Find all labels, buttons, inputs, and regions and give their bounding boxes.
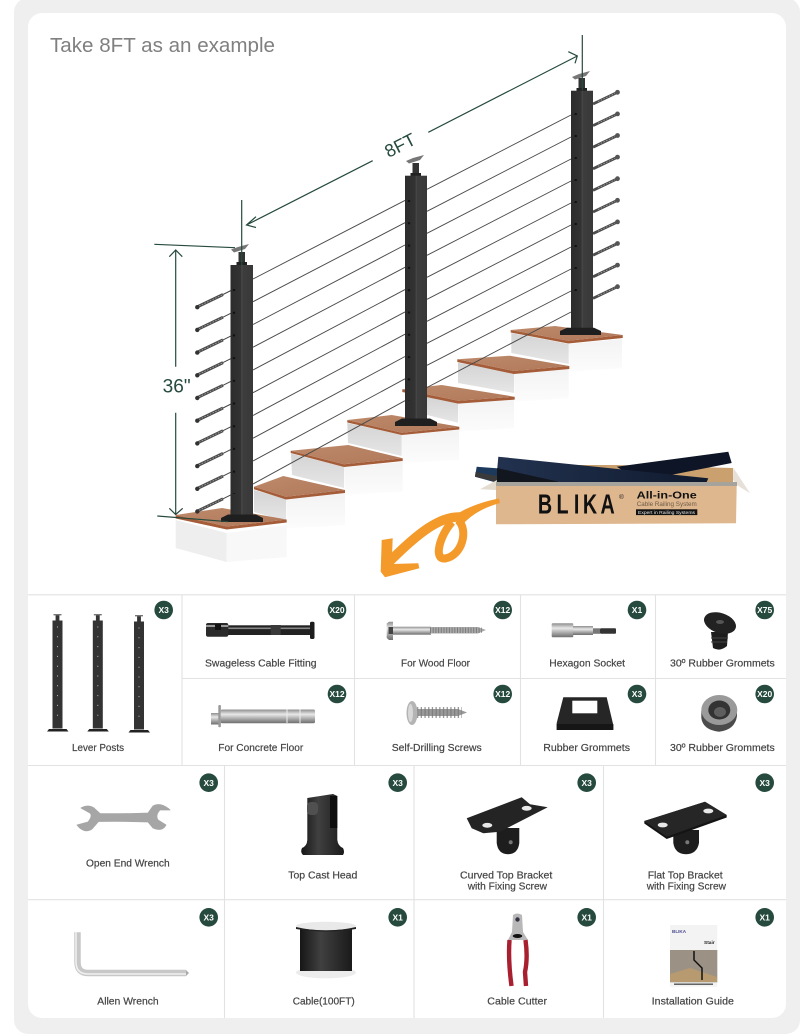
item: Cable spool: Cable(100FT)	[293, 996, 355, 1008]
item: Open End Wrench: X3	[203, 778, 214, 788]
item: Rubber Grommets: Rubber Grommets	[543, 742, 630, 754]
item: Open End Wrench	[77, 773, 218, 870]
parts grid lines	[28, 595, 786, 1018]
item: Cable Cutter: Cable Cutter	[487, 996, 548, 1008]
step 7	[511, 326, 623, 372]
item: Swageless Cable Fitting: X20	[329, 605, 345, 615]
step 4	[347, 415, 459, 463]
item: Lever Posts: X3	[158, 605, 169, 615]
item: For Concrete Floor	[211, 685, 346, 754]
item: For Wood Floor: X12	[495, 605, 511, 615]
item: Installation Guide	[652, 908, 774, 1008]
item: Installation Guide: Installation Guide	[652, 996, 734, 1008]
product box: ®	[619, 493, 624, 501]
item: Allen Wrench: X3	[203, 912, 214, 922]
item: Curved Top Bracket	[460, 773, 596, 892]
item: Lever Posts	[47, 601, 173, 754]
item: Installation Guide: X1	[759, 912, 770, 922]
step 1	[176, 508, 287, 562]
item: Open End Wrench: Open End Wrench	[86, 858, 170, 870]
item: Flat Top Bracket: Flat Top Bracket	[648, 869, 723, 881]
item: Cable Cutter: X1	[581, 912, 592, 922]
title: Take 8FT as an example	[50, 35, 275, 57]
item: For Wood Floor	[387, 601, 512, 669]
item: Top Cast Head: Top Cast Head	[288, 870, 357, 882]
item: For Concrete Floor: For Concrete Floor	[218, 742, 304, 754]
item: Flat Top Bracket: with Fixing Screw	[646, 880, 726, 892]
dimension: 36 inch: 36"	[163, 377, 191, 398]
item: Self-Drilling Screws	[392, 685, 512, 754]
item: Curved Top Bracket: X3	[581, 778, 592, 788]
post 1	[221, 244, 263, 522]
item: Hexagon Socket: Hexagon Socket	[549, 657, 625, 669]
cables between post 2 and post 3	[427, 115, 571, 388]
item: Self-Drilling Screws: Self-Drilling Screws	[392, 742, 482, 754]
item: Top Cast Head	[288, 773, 407, 882]
dimension: 8FT: 8FT	[381, 129, 419, 162]
item: Top Cast Head: X3	[392, 778, 403, 788]
item: Allen Wrench	[76, 908, 218, 1008]
item: Installation Guide: BLIKA	[672, 929, 687, 934]
item: Hexagon Socket: X1	[632, 605, 642, 615]
item: Self-Drilling Screws: X12	[495, 689, 511, 699]
right cable fittings	[593, 90, 620, 298]
staircase	[176, 326, 623, 562]
step 2	[254, 476, 345, 528]
post 3	[560, 71, 601, 335]
orange arrow	[381, 498, 500, 577]
item: Hexagon Socket	[549, 601, 646, 669]
cables between post 1 and post 2	[253, 200, 405, 484]
item: Curved Top Bracket: with Fixing Screw	[467, 880, 547, 892]
item: Lever Posts: Lever Posts	[72, 742, 124, 754]
product box: Expert in Railing Systems	[638, 510, 696, 515]
item: 30 degree Rubber Grommets (bottom): X20	[757, 689, 773, 699]
item: 30 degree Rubber Grommets (bottom): 30º Rubber Grommets	[670, 742, 775, 754]
item: Curved Top Bracket: Curved Top Bracket	[460, 869, 552, 881]
step 3	[291, 445, 403, 495]
item: Allen Wrench: Allen Wrench	[97, 996, 159, 1008]
item: Cable spool	[293, 908, 407, 1008]
product box: Cable Railing System	[637, 501, 697, 508]
dimension: 36 inch	[154, 244, 235, 522]
product box	[475, 452, 750, 524]
item: 30 degree Rubber Grommets (top): 30º Rubber Grommets	[670, 657, 775, 669]
item: 30 degree Rubber Grommets (top)	[670, 601, 775, 669]
item: 30 degree Rubber Grommets (bottom)	[670, 685, 775, 754]
step 5	[402, 385, 515, 432]
item: Flat Top Bracket: X3	[759, 778, 770, 788]
item: 30 degree Rubber Grommets (top): X75	[757, 605, 773, 615]
dimension: 8FT	[242, 35, 582, 265]
product box: BLIKA	[538, 489, 615, 520]
product box: All-in-One	[637, 490, 697, 502]
item: Swageless Cable Fitting: Swageless Cable Fitting	[205, 657, 317, 669]
item: For Wood Floor: For Wood Floor	[401, 657, 470, 669]
item: For Concrete Floor: X12	[329, 689, 345, 699]
item: Rubber Grommets	[543, 685, 646, 754]
item: Flat Top Bracket	[644, 773, 774, 892]
item: Swageless Cable Fitting	[205, 601, 346, 669]
left cable fittings	[195, 289, 234, 514]
item: Cable spool: X1	[392, 912, 403, 922]
step 6	[457, 356, 569, 402]
item: Installation Guide: Stair	[704, 940, 715, 946]
item: Cable Cutter	[487, 908, 596, 1008]
post 2	[395, 155, 437, 426]
item: Rubber Grommets: X3	[632, 689, 642, 699]
